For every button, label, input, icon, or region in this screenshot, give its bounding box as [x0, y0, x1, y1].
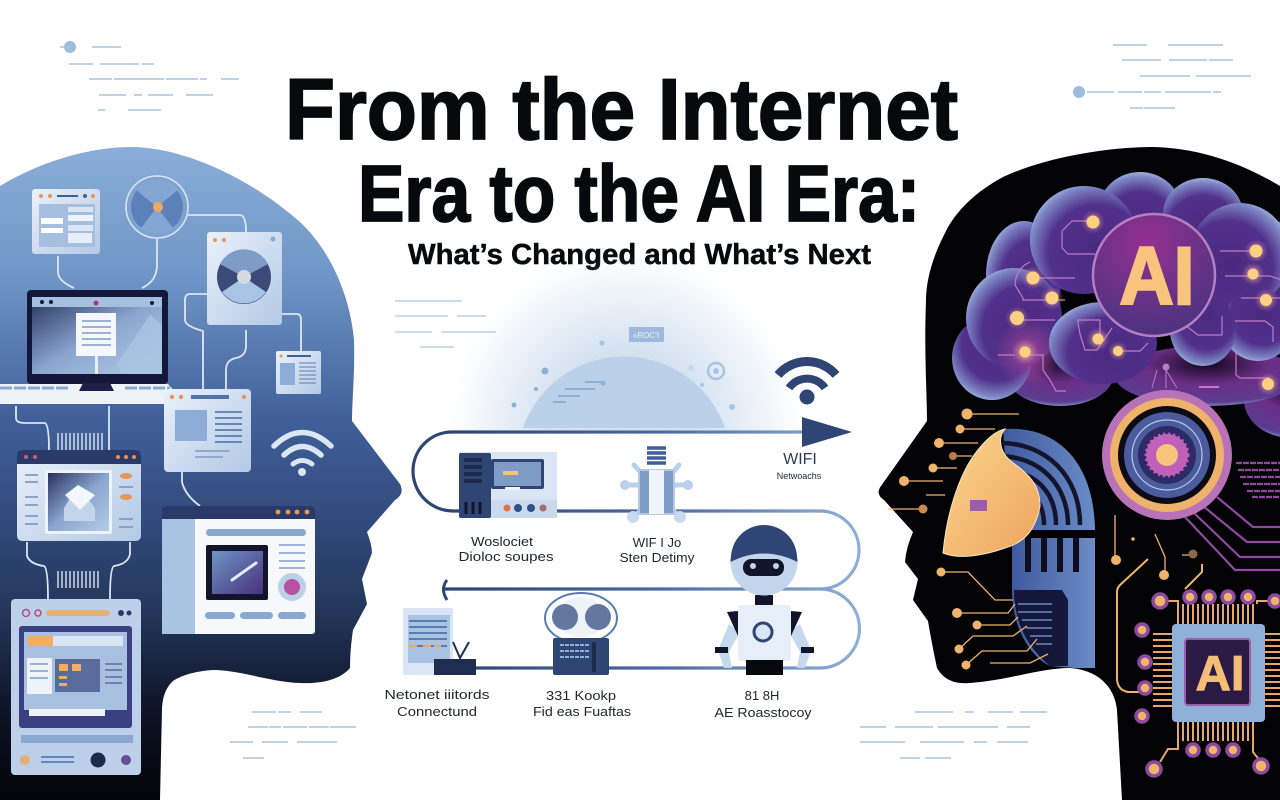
decorative lines bottom: [230, 712, 1047, 758]
label: step 5: [714, 688, 812, 720]
label: step 5: 81 8H: [745, 688, 779, 703]
label: step 3: Netonet iiitords: [384, 687, 490, 702]
title: What’s Changed and What’s Next: [408, 239, 871, 271]
gold circuit nodes: [899, 408, 1198, 670]
barcode strips: [58, 433, 102, 588]
icon: large app window: [162, 506, 315, 634]
label: step 4: Fid eas Fuaftas: [533, 704, 632, 719]
icon: document and router: [403, 608, 476, 675]
icon: wifi dark: [778, 362, 836, 404]
cybernetic column: [998, 429, 1095, 668]
head silhouette: left: [0, 147, 402, 800]
panel: internet era head: [0, 147, 402, 800]
head silhouette: right: [879, 147, 1280, 800]
AI brain badge: AI: [1120, 231, 1194, 322]
chip with AI label: AI: [1196, 647, 1244, 701]
label: step 2: [620, 535, 695, 565]
icon: browser device: [11, 599, 141, 775]
chip body: [1172, 624, 1265, 722]
gold mask: [943, 429, 1040, 556]
icon: fan panel: [207, 232, 282, 325]
eye lens: [1102, 390, 1232, 520]
label: step 1: Woslociet: [471, 534, 533, 549]
label: wifi sub: Netwoachs: [777, 471, 822, 481]
label tag: «ROC’I: [633, 331, 659, 340]
label: step 5: AE Roasstocoy: [714, 705, 812, 720]
icon: filter device: [620, 448, 693, 523]
icon: dual dial machine: [545, 593, 617, 675]
icon: content window: [164, 389, 251, 472]
label: step 3: [384, 687, 490, 719]
title: Era to the AI Era:: [358, 149, 920, 238]
title: From the Internet: [285, 62, 958, 158]
flow path with arrows: [413, 417, 859, 668]
chip legs: [1153, 604, 1280, 741]
globe dome: [450, 253, 800, 430]
brain node glows: [1005, 210, 1280, 396]
icon: window top left: [32, 189, 100, 254]
panel: ai era head: [879, 147, 1280, 800]
icon: mail window: [17, 450, 141, 541]
decorative text-lines top right: [1073, 45, 1251, 108]
label: wifi: WIFI: [783, 451, 817, 468]
icon: server: [459, 452, 557, 518]
label: step 3: Connectund: [397, 704, 477, 719]
chip with AI label: [1136, 591, 1280, 776]
gold circuit lines: [888, 414, 1202, 692]
label: step 2: WIF I Jo: [633, 535, 681, 550]
AI brain badge: [1093, 214, 1215, 336]
label: step 1: Dioloc soupes: [458, 549, 554, 564]
label: step 4: 331 Kookp: [546, 688, 616, 703]
wires: [16, 215, 301, 599]
panel: timeline diagram: [384, 253, 859, 720]
icon: laptop: [0, 290, 175, 404]
purple traces: [1185, 463, 1280, 570]
title: [285, 62, 958, 271]
label: step 1: [458, 534, 554, 564]
label tag: [629, 327, 664, 342]
decorative text-lines top left: [60, 41, 239, 110]
brain: [952, 172, 1280, 438]
icon: round fan: [126, 176, 188, 238]
step labels: [384, 451, 822, 720]
icon: wifi light: [274, 432, 331, 476]
label: step 2: Sten Detimy: [620, 550, 695, 565]
icon: small window: [276, 351, 321, 394]
decorative lines mid: [395, 301, 496, 347]
circuit traces: [998, 221, 1280, 391]
icon: robot: [715, 525, 814, 675]
label: step 4: [533, 688, 632, 719]
chip pads: [1136, 591, 1280, 776]
